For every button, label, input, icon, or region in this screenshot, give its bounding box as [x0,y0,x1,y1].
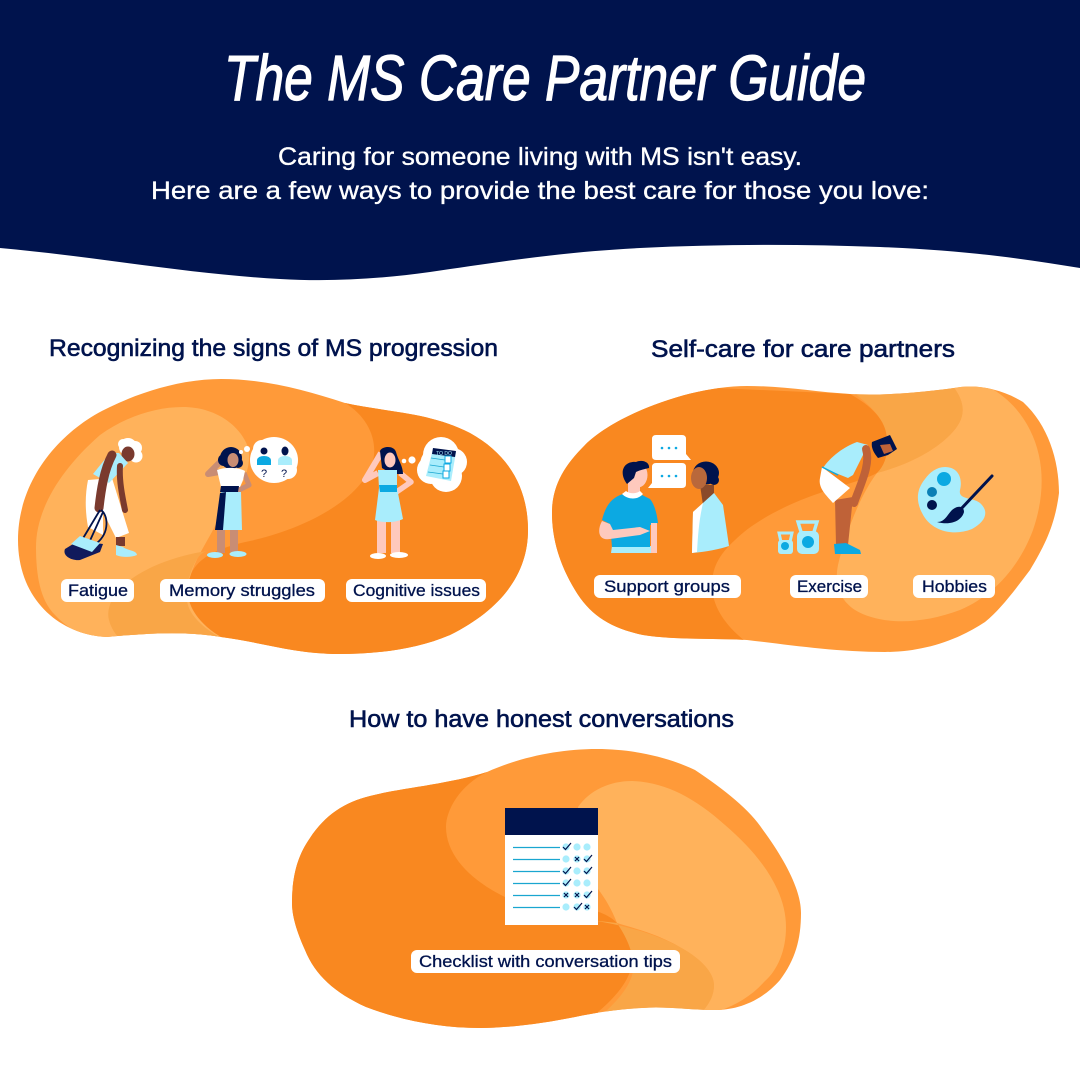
panel: signs of MS progression [18,379,528,654]
label: fatigue: Fatigue [68,581,128,600]
label: memory struggles [160,579,325,602]
thought bubble: to-do list: TO DO [436,451,452,457]
heading: recognizing the signs: Recognizing the signs of MS progression [49,335,498,362]
label: fatigue [61,579,134,602]
heading: honest conversations: How to have honest conversations [349,706,734,733]
intro text [151,143,929,205]
label: exercise: Exercise [797,577,862,596]
title: The MS Care Partner Guide [224,42,866,114]
label: hobbies [913,575,995,598]
panel: honest conversations [292,749,801,1028]
figure: memory struggles woman [207,447,249,558]
panel: self-care [552,386,1059,652]
thought bubble: faces [239,437,298,483]
icon: palette and brush [918,467,992,532]
figure: fatigue woman with bag [64,438,142,560]
figure: man bending over [820,435,897,554]
header banner [0,0,1080,280]
label: exercise [790,575,868,598]
figure: man in light jacket [691,462,729,553]
figure: cognitive issues woman [365,447,411,559]
intro text: Here are a few ways to provide the best care for those you love: [151,177,929,205]
speech bubbles [648,435,691,488]
figure: man in blue shirt [599,461,658,553]
heading: self-care: Self-care for care partners [651,336,955,363]
label: support groups: Support groups [604,577,730,596]
thought bubble: faces: ? [281,468,287,480]
label: cognitive issues: Cognitive issues [353,581,480,600]
blob background [292,749,801,1028]
thought bubble: faces: ? [261,468,267,480]
label: memory struggles: Memory struggles [169,581,315,600]
blob background [18,379,528,654]
label: hobbies: Hobbies [922,577,987,596]
checklist [505,808,598,925]
blob background [552,386,1059,652]
label: checklist with conversation tips: Checklist with conversation tips [419,952,672,971]
thought bubble: to-do list [402,437,467,492]
label: support groups [594,575,741,598]
intro text: Caring for someone living with MS isn't easy. [278,143,802,171]
icon: kettlebells [778,522,819,554]
